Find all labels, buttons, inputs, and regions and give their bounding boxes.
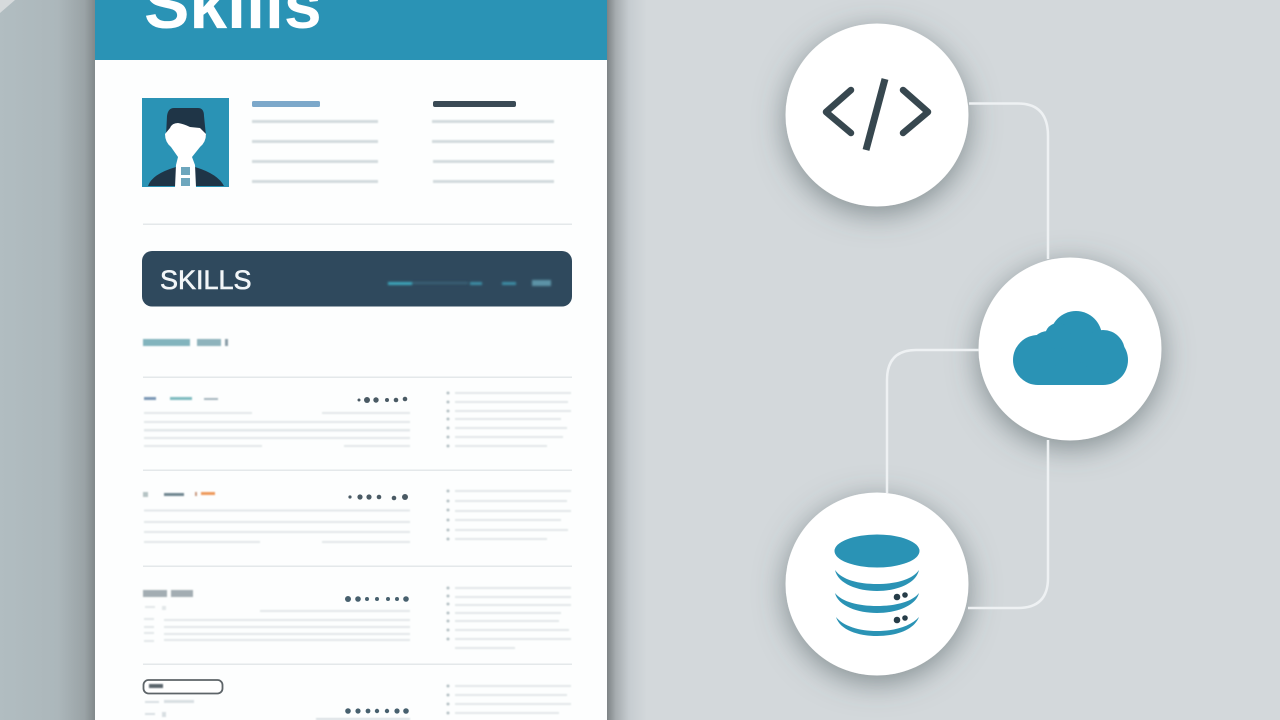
contact details left [252, 101, 378, 183]
heading: skills: SKILLS [160, 265, 252, 295]
contact details right [432, 101, 554, 183]
skill row 2 [143, 490, 571, 543]
row 2 labels [143, 492, 215, 497]
icon: profile photo [142, 98, 229, 187]
row 3 label [143, 590, 193, 597]
row 1 bullets [446, 392, 571, 448]
row 3 bullets [446, 586, 571, 649]
row 4 description [145, 700, 410, 720]
icon: code circle [786, 24, 968, 206]
row 3 description [144, 606, 410, 642]
row 4 outlined tag [144, 680, 222, 694]
panel: resume document [95, 0, 607, 720]
row 1 description [144, 412, 410, 447]
row 2 rating [348, 494, 408, 500]
row 3 rating [345, 596, 409, 602]
icon: cloud circle [978, 258, 1162, 440]
row 2 description [144, 510, 410, 543]
skill row 3 [143, 586, 571, 649]
row 4 rating [345, 708, 409, 714]
skill row 4 [144, 680, 571, 720]
skill row 1 [144, 392, 571, 448]
header band [95, 0, 607, 60]
skills heading bar [142, 251, 572, 306]
row 2 bullets [446, 490, 571, 540]
icon: database circle [786, 492, 968, 676]
row 4 bullets [446, 684, 571, 714]
subheading [143, 339, 228, 346]
row 1 labels [144, 397, 218, 400]
row 1 rating [358, 397, 407, 403]
connectors between icons [887, 104, 1048, 608]
